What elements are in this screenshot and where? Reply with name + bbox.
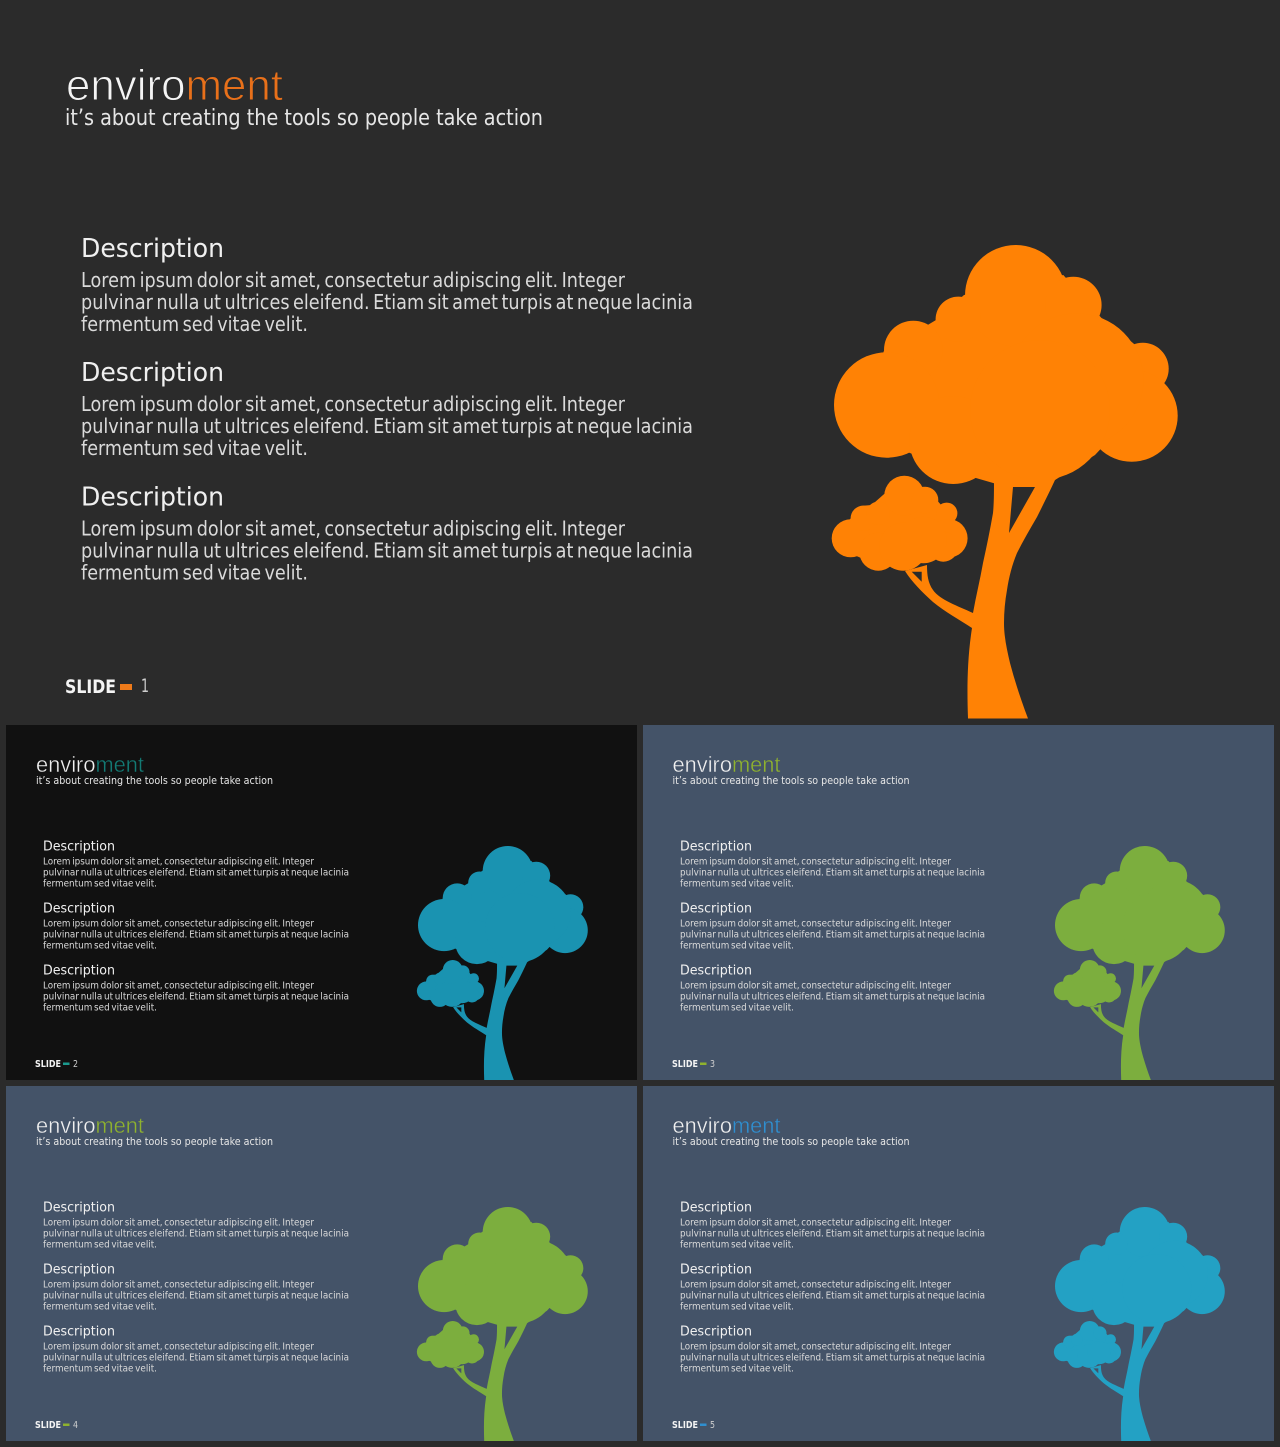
text block: description 3	[81, 482, 693, 584]
text block: descriptions: Description	[680, 964, 752, 978]
text block: descriptions: Description	[43, 1200, 115, 1216]
text block: description 3: fermentum sed vitae velit.	[81, 560, 308, 584]
text block: descriptions: Lorem ipsum dolor sit amet, consectetur adipiscing elit. Integer	[43, 1280, 315, 1290]
text block: descriptions: pulvinar nulla ut ultrices eleifend. Etiam sit amet turpis at neque lacinia	[680, 930, 985, 940]
icon: green tree	[1054, 846, 1225, 1080]
panel: slide 5	[643, 1086, 1274, 1441]
text block: descriptions: fermentum sed vitae velit.	[680, 1240, 794, 1250]
text block: description 2: Lorem ipsum dolor sit amet, consectetur adipiscing elit. Integer	[81, 392, 625, 416]
text block: descriptions: fermentum sed vitae velit.	[43, 1364, 157, 1374]
panel: slide 3	[643, 725, 1274, 1080]
text block: descriptions: Description	[680, 1324, 752, 1340]
text block: descriptions: fermentum sed vitae velit.	[43, 1002, 157, 1014]
subtitle: it’s about creating the tools so people take action	[65, 106, 543, 131]
text block: descriptions: pulvinar nulla ut ultrices eleifend. Etiam sit amet turpis at neque lacinia	[680, 992, 985, 1002]
text block: descriptions: fermentum sed vitae velit.	[43, 1302, 157, 1312]
title: enviroment	[36, 752, 144, 777]
icon: green tree	[417, 1207, 588, 1441]
text block: descriptions: Description	[43, 964, 115, 978]
text block: description 1	[81, 234, 693, 336]
subtitle: it’s about creating the tools so people take action	[672, 1135, 910, 1148]
text block: description 3: pulvinar nulla ut ultrices eleifend. Etiam sit amet turpis at neque lacinia	[81, 538, 693, 562]
text block: description 2	[81, 358, 693, 460]
panel: slide 4	[6, 1086, 637, 1441]
text block: descriptions: fermentum sed vitae velit.	[680, 1002, 794, 1014]
text block: descriptions: Lorem ipsum dolor sit amet, consectetur adipiscing elit. Integer	[43, 1218, 315, 1228]
text block: description 2: Description	[81, 358, 224, 388]
text block: descriptions: fermentum sed vitae velit.	[43, 1240, 157, 1250]
subtitle: it’s about creating the tools so people take action	[36, 1135, 273, 1148]
text block: descriptions: fermentum sed vitae velit.	[43, 940, 157, 952]
text block: descriptions: pulvinar nulla ut ultrices eleifend. Etiam sit amet turpis at neque lacinia	[680, 1290, 985, 1302]
text block: descriptions: pulvinar nulla ut ultrices eleifend. Etiam sit amet turpis at neque lacinia	[680, 1352, 985, 1364]
text block: descriptions	[680, 840, 985, 1014]
text block: descriptions: Description	[43, 1324, 115, 1340]
slide number: 2	[73, 1059, 78, 1070]
icon: blue tree	[1054, 1207, 1225, 1441]
text block: descriptions: Lorem ipsum dolor sit amet, consectetur adipiscing elit. Integer	[43, 1342, 315, 1352]
text block: descriptions: pulvinar nulla ut ultrices eleifend. Etiam sit amet turpis at neque lacinia	[43, 1352, 349, 1364]
text block: descriptions: Lorem ipsum dolor sit amet, consectetur adipiscing elit. Integer	[43, 856, 315, 868]
subtitle: it’s about creating the tools so people take action	[672, 774, 910, 787]
text block: descriptions: Description	[680, 1262, 752, 1278]
text block: descriptions: pulvinar nulla ut ultrices eleifend. Etiam sit amet turpis at neque lacinia	[43, 1290, 349, 1302]
icon: orange tree	[832, 245, 1178, 719]
text block: descriptions: fermentum sed vitae velit.	[43, 878, 157, 890]
text block: descriptions: pulvinar nulla ut ultrices eleifend. Etiam sit amet turpis at neque lacinia	[680, 1228, 985, 1240]
title: enviroment	[672, 1113, 780, 1138]
text block: descriptions: pulvinar nulla ut ultrices eleifend. Etiam sit amet turpis at neque lacinia	[43, 930, 349, 940]
text block: descriptions: Lorem ipsum dolor sit amet, consectetur adipiscing elit. Integer	[680, 980, 952, 992]
panel: main slide 1	[65, 61, 1178, 718]
slide number: 1	[141, 675, 149, 697]
slide number: 3	[710, 1059, 715, 1070]
text block: descriptions: pulvinar nulla ut ultrices eleifend. Etiam sit amet turpis at neque lacinia	[43, 992, 349, 1002]
text block: descriptions: Description	[680, 1200, 752, 1216]
text block: descriptions: pulvinar nulla ut ultrices eleifend. Etiam sit amet turpis at neque lacinia	[43, 1228, 349, 1240]
title: enviroment	[66, 61, 283, 110]
text block: descriptions: Description	[43, 1262, 115, 1278]
text block: descriptions: pulvinar nulla ut ultrices eleifend. Etiam sit amet turpis at neque lacinia	[680, 868, 985, 878]
text block: descriptions	[680, 1200, 985, 1374]
text block: description 1: pulvinar nulla ut ultrices eleifend. Etiam sit amet turpis at neque lacinia	[81, 290, 693, 314]
text block: description 3: Lorem ipsum dolor sit amet, consectetur adipiscing elit. Integer	[81, 516, 625, 540]
text block: descriptions: fermentum sed vitae velit.	[680, 1364, 794, 1374]
text block: descriptions: fermentum sed vitae velit.	[680, 1302, 794, 1312]
text block: description 2: pulvinar nulla ut ultrices eleifend. Etiam sit amet turpis at neque lacinia	[81, 414, 693, 438]
text block: descriptions: Lorem ipsum dolor sit amet, consectetur adipiscing elit. Integer	[680, 1218, 952, 1228]
panel: slide 2	[6, 725, 637, 1080]
slide number: SLIDE	[35, 1420, 61, 1431]
text block: descriptions: Description	[43, 840, 115, 854]
text block: descriptions	[43, 1200, 349, 1374]
subtitle: it’s about creating the tools so people take action	[36, 774, 273, 787]
text block: descriptions: Description	[680, 902, 752, 916]
slide number: SLIDE	[672, 1420, 698, 1431]
title: enviroment	[36, 1113, 144, 1138]
text block: description 3: Description	[81, 482, 224, 512]
text block: descriptions: Lorem ipsum dolor sit amet, consectetur adipiscing elit. Integer	[680, 1280, 952, 1290]
text block: descriptions: Lorem ipsum dolor sit amet, consectetur adipiscing elit. Integer	[43, 980, 315, 992]
slide number: SLIDE	[65, 676, 116, 698]
text block: descriptions: Lorem ipsum dolor sit amet, consectetur adipiscing elit. Integer	[43, 918, 315, 930]
text block: descriptions: Description	[680, 840, 752, 854]
title: enviroment	[672, 752, 780, 777]
text block: descriptions: pulvinar nulla ut ultrices eleifend. Etiam sit amet turpis at neque lacinia	[43, 868, 349, 878]
text block: description 1: Lorem ipsum dolor sit amet, consectetur adipiscing elit. Integer	[81, 268, 625, 292]
text block: descriptions: fermentum sed vitae velit.	[680, 878, 794, 890]
slide number: 5	[710, 1420, 715, 1431]
slide number: 4	[73, 1420, 78, 1431]
slide number: SLIDE	[672, 1059, 698, 1070]
text block: descriptions: Description	[43, 902, 115, 916]
text block: descriptions: Lorem ipsum dolor sit amet, consectetur adipiscing elit. Integer	[680, 856, 952, 868]
text block: descriptions: Lorem ipsum dolor sit amet, consectetur adipiscing elit. Integer	[680, 1342, 952, 1352]
text block: descriptions: fermentum sed vitae velit.	[680, 940, 794, 952]
text block: description 1: Description	[81, 234, 224, 264]
slide number: SLIDE	[35, 1059, 61, 1070]
text block: description 1: fermentum sed vitae velit.	[81, 312, 308, 336]
text block: descriptions	[43, 840, 349, 1014]
text block: description 2: fermentum sed vitae velit.	[81, 436, 308, 460]
icon: teal tree	[417, 846, 588, 1080]
text block: descriptions: Lorem ipsum dolor sit amet, consectetur adipiscing elit. Integer	[680, 918, 952, 930]
